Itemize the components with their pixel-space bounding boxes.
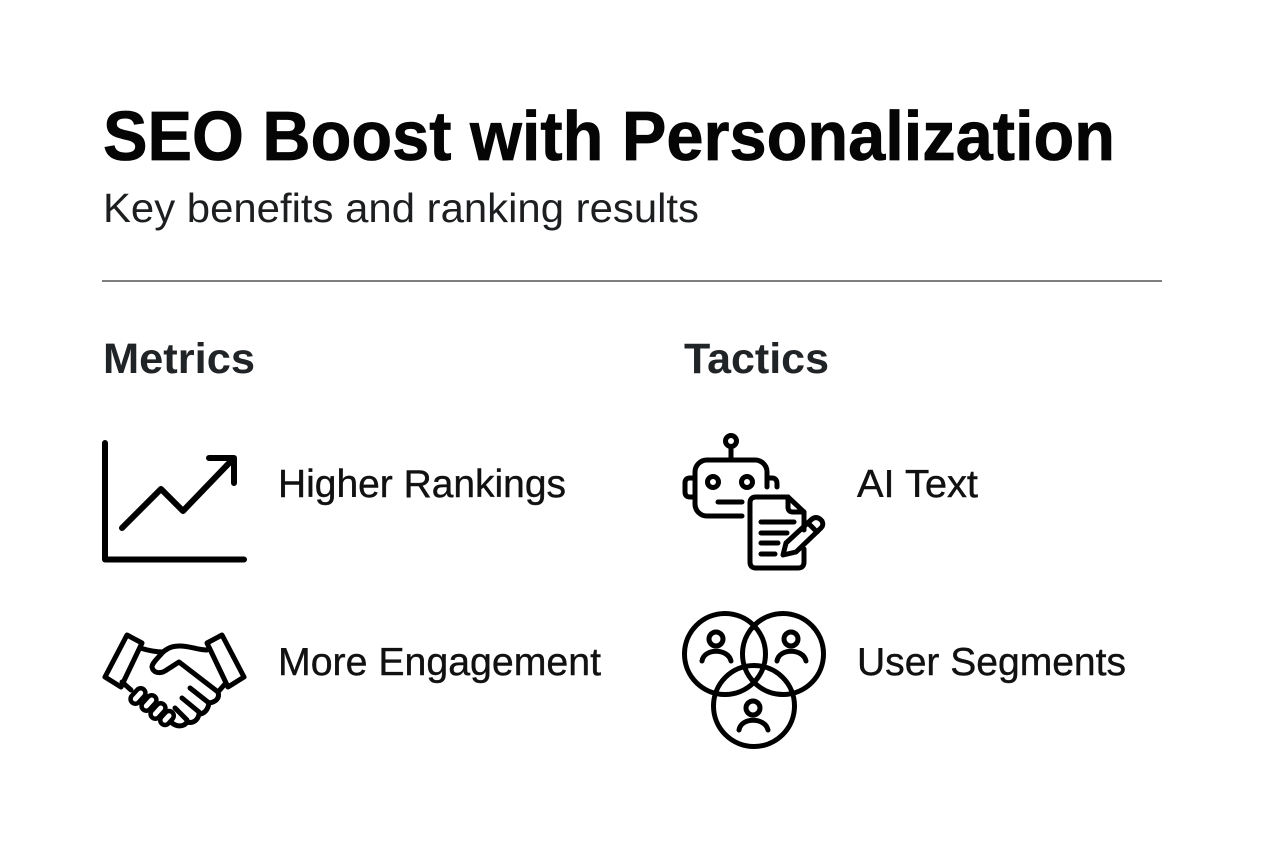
panel: tactics [684, 335, 1126, 746]
title: SEO Boost with Personalization [103, 97, 1115, 175]
icon: line chart [105, 443, 244, 560]
label: higher rankings: Higher Rankings [278, 463, 566, 506]
label: user segments: User Segments [857, 641, 1126, 684]
panel: metrics [103, 335, 601, 726]
icon: handshake [105, 635, 244, 726]
label: more engagement: More Engagement [278, 641, 601, 684]
icon: robot with document [685, 436, 823, 568]
label: ai text: AI Text [857, 463, 978, 506]
icon: overlapping user segments [684, 614, 824, 746]
subtitle: Key benefits and ranking results [103, 185, 699, 231]
heading: tactics: Tactics [684, 335, 829, 383]
heading: metrics: Metrics [103, 335, 255, 383]
